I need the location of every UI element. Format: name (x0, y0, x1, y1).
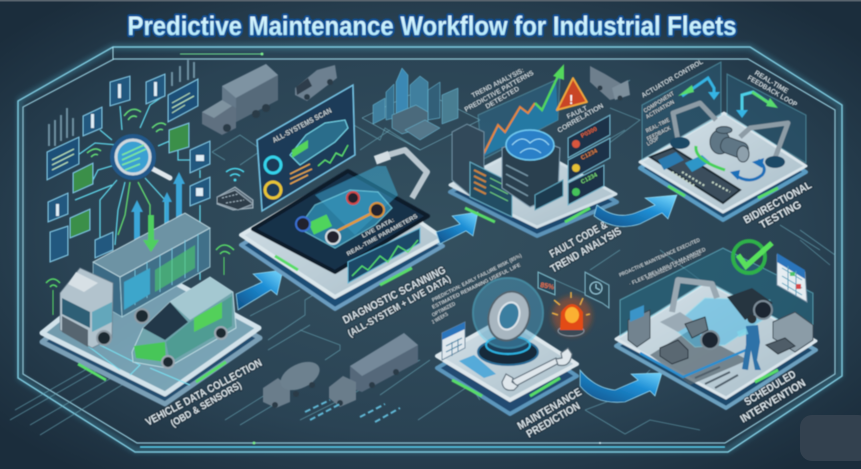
trend line (318, 145, 348, 166)
icon: calendar (442, 322, 465, 360)
glass sphere (473, 278, 543, 348)
prediction details text: 2 WEEKS (431, 311, 450, 326)
van (132, 277, 236, 368)
platform: fault code and trend analysis: C1234 (580, 172, 599, 186)
gauges (265, 157, 281, 173)
blue vehicle hologram (672, 298, 770, 347)
label: fault code and trend analysis: TREND ANALYSIS (548, 225, 624, 276)
progress plate (459, 355, 496, 378)
floor blue strip (640, 347, 753, 377)
brain (506, 130, 554, 160)
label: vehicle data collection: (OBD & SENSORS) (169, 380, 244, 430)
upward data arrows (131, 172, 185, 250)
proactive maintenance text: MINIMIZED DOWNTIME (645, 251, 703, 282)
robot arm (672, 280, 717, 312)
platform: scheduled intervention (616, 248, 816, 408)
icon: sensor network (47, 60, 210, 280)
actuator labels (640, 58, 705, 148)
actuator labels: COMPONENT (643, 91, 676, 115)
road pieces (305, 400, 400, 422)
control console (650, 148, 740, 203)
label: bidirectional testing: TESTING (758, 199, 804, 232)
flow arrows (682, 78, 714, 97)
real-time feedback loop label: REAL-TIME (753, 70, 789, 95)
trend analysis label: DETECTED (484, 86, 521, 111)
icon: magnifier (112, 136, 170, 178)
platform: maintenance prediction (437, 272, 577, 414)
legend lines (290, 164, 312, 184)
engine and battery (660, 340, 688, 364)
platform: bidirectional testing (640, 62, 806, 220)
actuator labels: FEEDBACK (646, 125, 673, 143)
tools (695, 367, 738, 388)
arrow: step 2 to 3 (436, 212, 478, 244)
icon: 85% tag (538, 272, 555, 295)
actuator labels: ACTUATOR CONTROL (640, 58, 705, 100)
arrow: step 3 to 4 (594, 195, 677, 227)
label: bidirectional testing: BIDIRECTIONAL (742, 179, 814, 227)
bearing (482, 286, 536, 346)
van: gray top (295, 65, 337, 101)
label: diagnostic scanning: (ALL-SYSTEM + LIVE DATA) (346, 274, 453, 340)
robot arm left (673, 103, 716, 140)
icon: wifi signals (87, 109, 166, 157)
fault correlation label: CORRELATION (556, 103, 605, 135)
arrow: step 1 to 2 (236, 270, 283, 310)
city skyline (362, 68, 480, 150)
label: maintenance prediction: MAINTENANCE (516, 386, 584, 433)
platform: fault code and trend analysis (450, 64, 617, 236)
platform: fault code and trend analysis: ! (569, 92, 573, 107)
truck: cab (60, 268, 113, 348)
arrow: step 5 to 6 (580, 370, 662, 402)
truck: gray top (202, 64, 278, 135)
prediction details text (431, 253, 523, 326)
trend analysis label: TREND ANALYSIS: (471, 67, 526, 100)
floor shadow (650, 330, 748, 385)
proactive maintenance text: PROACTIVE MAINTENANCE EXECUTED (618, 238, 701, 279)
icon: wrench (502, 348, 572, 390)
platform: fault code and trend analysis: C1234 (580, 148, 599, 162)
icon: green checkmark (733, 241, 772, 273)
icon: OBD connector (217, 168, 253, 210)
icon tiles (47, 74, 210, 262)
circular arrows (696, 146, 725, 170)
actuator labels: ACTIVATION (645, 100, 676, 121)
proactive maintenance text: · FLEET RELIABILITY MAXIMIZED (628, 247, 707, 288)
label: scheduled intervention: INTERVENTION (738, 377, 808, 426)
fault codes (568, 115, 610, 158)
truck: cargo box (93, 262, 122, 317)
technician (737, 314, 761, 370)
real-time feedback loop label: FEEDBACK LOOP (746, 75, 798, 109)
platform: fault code and trend analysis: P0300 (580, 126, 599, 140)
platform: vehicle data collection (42, 213, 260, 404)
pedestal (478, 339, 538, 365)
label: diagnostic scanning: DIAGNOSTIC SCANNING (341, 264, 448, 327)
icon: alarm beacon (552, 292, 592, 336)
actuator labels: LOOP (646, 136, 660, 148)
kiosk (628, 310, 650, 347)
label: maintenance prediction: PREDICTION (524, 400, 582, 441)
live data label: LIVE DATA: (361, 218, 396, 240)
robot arm (378, 150, 427, 198)
small status panels (535, 180, 563, 210)
title: Predictive Maintenance Workflow for Industrial Fleets (128, 11, 736, 41)
actuator labels: REAL-TIME (645, 118, 671, 135)
valve (710, 126, 750, 162)
icon: clock bubble (585, 272, 609, 308)
tablet screen (253, 171, 428, 272)
trend analysis label: PREDICTIVE PATTERNS (464, 70, 535, 114)
platform: maintenance prediction: 85% (540, 282, 555, 292)
platform: diagnostic scanning: REAL-TIME PARAMETERS (346, 214, 419, 258)
live data chart (348, 228, 420, 283)
icon: warning triangle (557, 78, 587, 110)
trend line (482, 103, 535, 157)
label: fault code and trend analysis: FAULT CODE & (548, 219, 609, 261)
car outline (290, 120, 348, 165)
background circuit lines (10, 80, 835, 435)
prediction details text: PREDICTION: EARLY FAILURE RISK (85%) (431, 253, 523, 304)
label: vehicle data collection: VEHICLE DATA COLLECTION (144, 357, 264, 429)
glass back walls (620, 248, 813, 338)
sensor wires (75, 95, 200, 280)
signal bars (48, 60, 195, 146)
scan beam (315, 166, 398, 235)
right cabinet (773, 312, 813, 352)
label: scheduled intervention: SCHEDULED (742, 368, 798, 409)
platform: diagnostic scanning (241, 150, 443, 309)
title: Predictive Maintenance Workflow for Industrial Fleets (128, 11, 736, 41)
servers (452, 124, 484, 195)
glass walls (642, 62, 721, 160)
robot arm right (740, 123, 788, 158)
prediction details text: ESTIMATED REMAINING USEFUL LIFE (431, 262, 522, 311)
car on tablet (298, 190, 392, 248)
wifi signals (46, 245, 234, 287)
label: all-systems scan: ALL-SYSTEMS SCAN (271, 106, 333, 145)
chassis (727, 288, 773, 320)
panel: all-systems scan (257, 85, 355, 211)
prediction details text: OPTIMIZED (431, 301, 457, 319)
icon: schedule calendar (777, 253, 807, 302)
chart backdrop (478, 78, 560, 160)
gray trucks bottom (263, 333, 418, 408)
gray tanker (590, 66, 630, 100)
fault correlation label: FAULT (566, 105, 589, 121)
